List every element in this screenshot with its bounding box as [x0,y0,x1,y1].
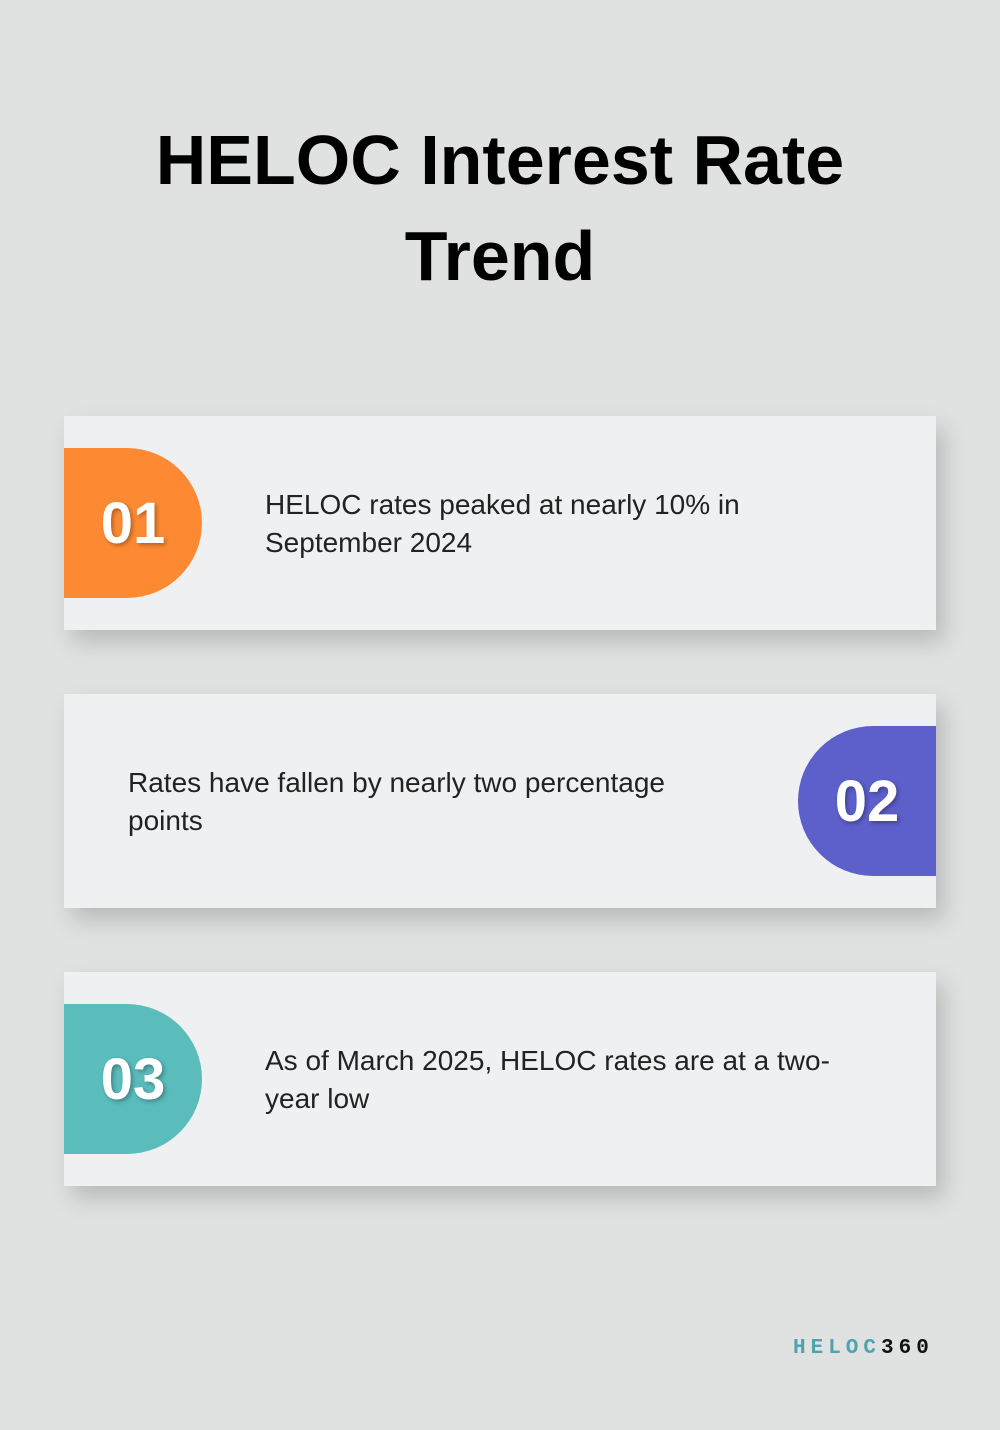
badge 01: 01 [101,490,165,556]
card 3 [64,972,936,1186]
text 2: Rates have fallen by nearly two percentage points [128,767,665,836]
title: HELOC Interest Rate [156,121,844,199]
title: Trend [405,217,595,295]
badge 02: 02 [835,768,899,834]
title [156,121,844,295]
logo: HELOC360 [793,1337,934,1360]
card 2 [64,694,936,908]
badge 03 [64,1004,202,1154]
badge 02 [798,726,936,876]
text 3: As of March 2025, HELOC rates are at a two-year low [265,1045,830,1114]
badge 01 [64,448,202,598]
badge 03: 03 [101,1046,165,1112]
text 1: HELOC rates peaked at nearly 10% in September 2024 [265,489,740,558]
card 1 [64,416,936,630]
